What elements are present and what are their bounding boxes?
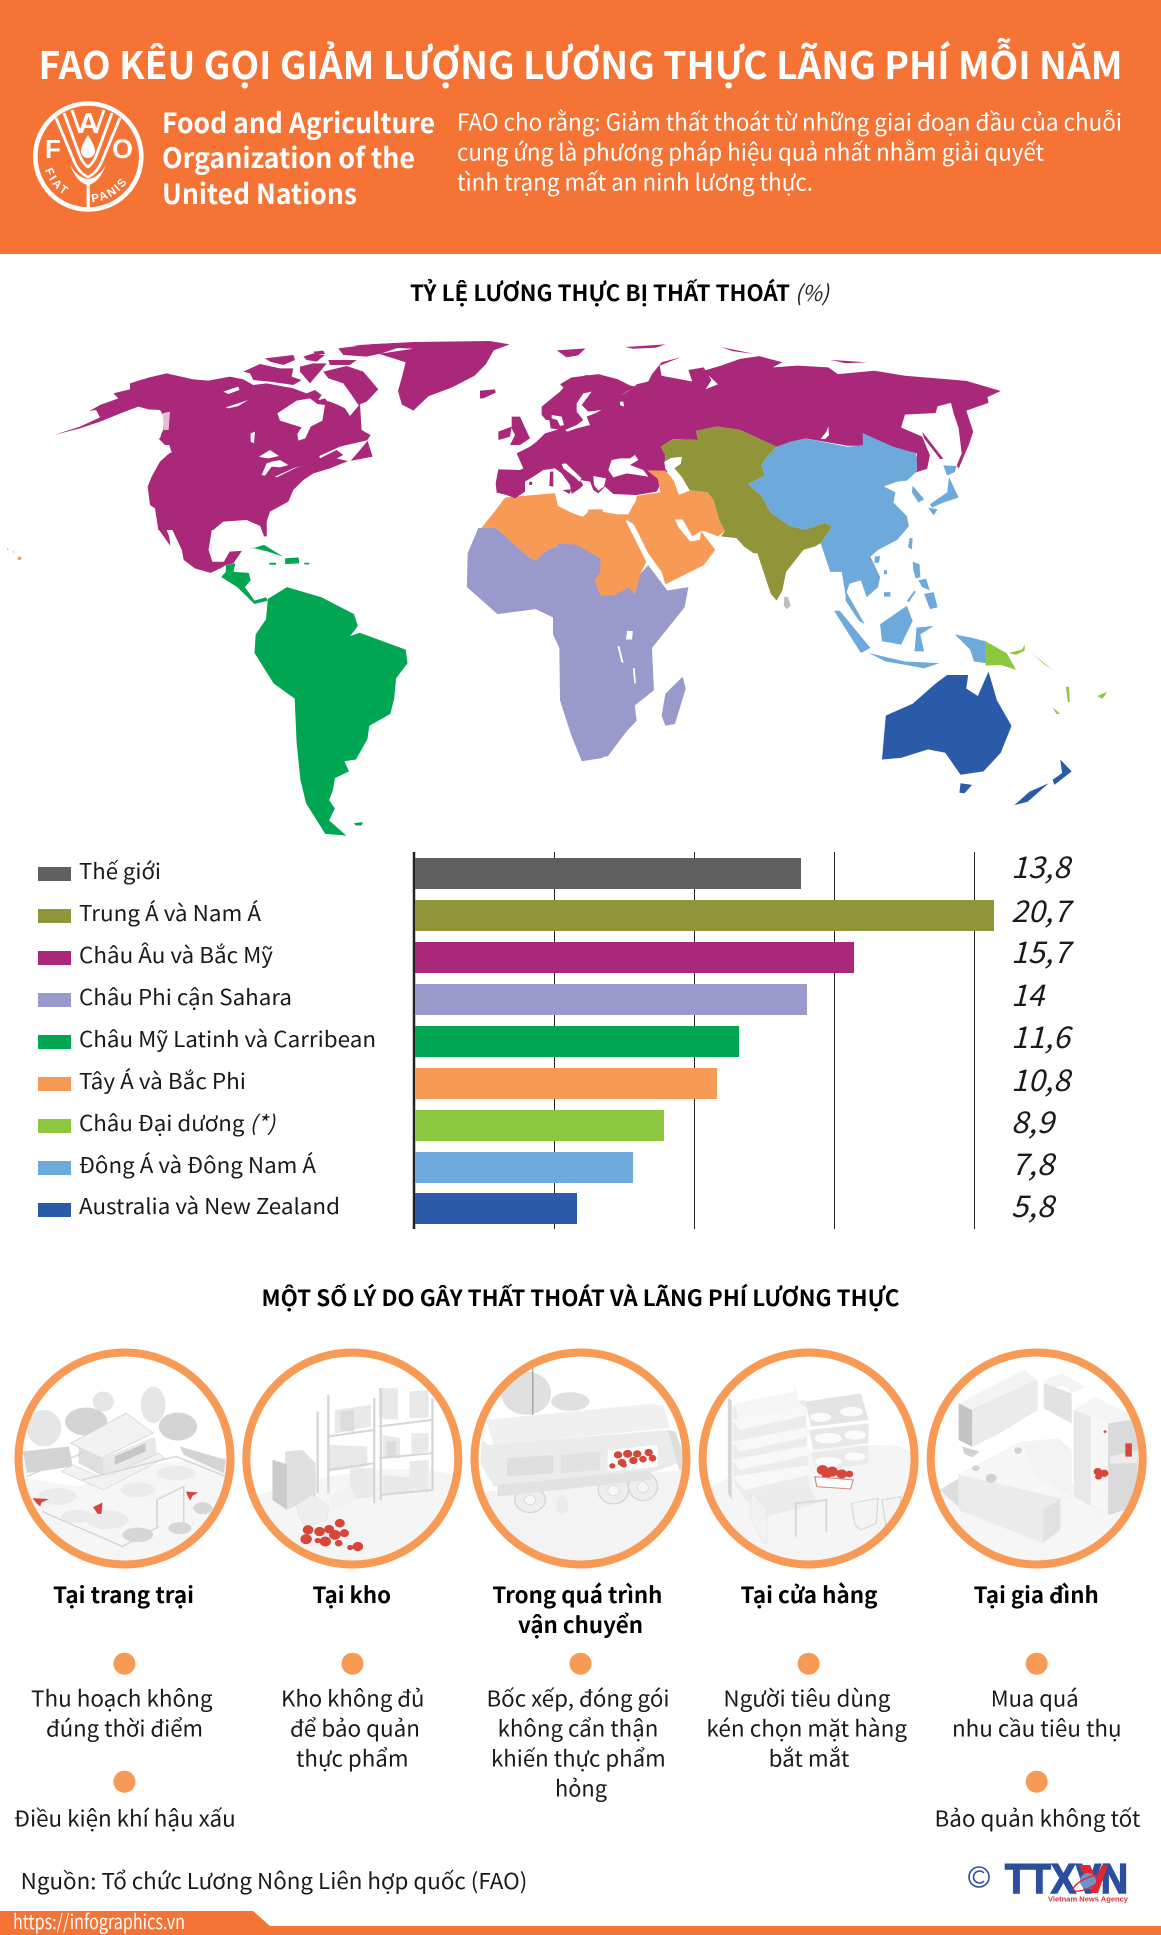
values: 15,7 [1011, 928, 1074, 972]
heading: loss rate: (%) [795, 276, 831, 308]
text: warehouse reasons: Kho không đủ [281, 1682, 424, 1714]
legend labels: Châu Đại dương (*) [79, 1107, 277, 1138]
values [1011, 843, 1074, 1226]
coastal speckle [163, 412, 170, 430]
column titles: vận chuyển [518, 1608, 643, 1640]
FAO name: United Nations [162, 173, 357, 213]
values: 13,8 [1011, 843, 1073, 887]
region: Canada and United States [54, 343, 413, 530]
text: store reasons: bắt mắt [769, 1742, 849, 1774]
illustration: kitchen [928, 1352, 1150, 1570]
icon: FAO logo [33, 101, 144, 212]
values: 7,8 [1011, 1140, 1057, 1184]
text: store reasons [706, 1682, 908, 1774]
values: 11,6 [1011, 1013, 1073, 1057]
text: transport reasons: không cẩn thận [498, 1712, 658, 1744]
illustration: store [703, 1352, 920, 1570]
intro text: FAO cho rằng: Giảm thất thoát từ những giai đoạn đầu của chuỗi [457, 104, 1122, 138]
legend labels: Châu Âu và Bắc Mỹ [79, 939, 273, 970]
region: Sub-Saharan Africa (west) [467, 528, 603, 761]
legend labels: Châu Phi cận Sahara [79, 981, 292, 1012]
sea: Caspian [664, 457, 690, 495]
text: farm reasons: Thu hoạch không [31, 1682, 213, 1714]
intro text: tình trạng mất an ninh lương thực. [457, 164, 813, 198]
column titles: Tại kho [312, 1578, 391, 1610]
source: Nguồn: Tổ chức Lương Nông Liên hợp quốc (FAO) [21, 1864, 527, 1896]
icon: FAO logo: FIAT [45, 168, 69, 194]
FAO name [162, 102, 435, 213]
region: East and Southeast Asia [748, 433, 985, 668]
illustration: farm [15, 1352, 237, 1570]
region: Europe [480, 375, 668, 498]
legend swatches [38, 867, 71, 1217]
text: transport reasons [486, 1682, 670, 1804]
text: transport reasons: Bốc xếp, đóng gói [486, 1682, 670, 1714]
column titles: Tại trang trại [53, 1578, 194, 1610]
values: 10,8 [1011, 1056, 1073, 1100]
region: West Asia and North Africa (west) [481, 493, 603, 560]
heading: reasons: MỘT SỐ LÝ DO GÂY THẤT THOÁT VÀ LÃNG PHÍ LƯƠNG THỰC [262, 1281, 899, 1313]
legend labels: Trung Á và Nam Á [79, 897, 261, 928]
text: household reasons [934, 1682, 1140, 1834]
region: Australia and New Zealand [882, 672, 1072, 805]
icon: FAO logo: O [112, 134, 133, 164]
icon: FAO logo: F [45, 134, 61, 164]
title: FAO KÊU GỌI GIẢM LƯỢNG LƯƠNG THỰC LÃNG PHÍ MỖI NĂM [38, 35, 1122, 90]
text: household reasons: Mua quá [991, 1682, 1079, 1714]
footer bar [0, 1906, 1161, 1935]
bullet dots [113, 1653, 1048, 1793]
legend labels: Đông Á và Đông Nam Á [79, 1149, 316, 1180]
icon: FAO logo: PANIS [92, 178, 126, 202]
text: household reasons: Bảo quản không tốt [934, 1802, 1140, 1834]
logo: TTXVN: Vietnam News Agency [1048, 1895, 1129, 1904]
region: Oceania [985, 641, 1107, 714]
logo: TTXVN: TTXVN [1005, 1855, 1128, 1902]
column titles: Tại gia đình [974, 1578, 1099, 1610]
region: West Asia and North Africa (east) [558, 470, 725, 596]
world map [7, 341, 1107, 836]
column titles: Tại cửa hàng [740, 1578, 878, 1610]
lakes and bays [157, 387, 368, 477]
region: Greenland and Mexico [157, 341, 586, 573]
values: 14 [1011, 971, 1046, 1015]
text: store reasons: Người tiêu dùng [723, 1682, 891, 1714]
text: farm reasons [14, 1682, 236, 1834]
text: warehouse reasons [281, 1682, 424, 1774]
legend labels: Australia và New Zealand [79, 1190, 340, 1221]
text: household reasons: nhu cầu tiêu thụ [952, 1712, 1122, 1744]
bars [415, 858, 994, 1224]
text: farm reasons: Điều kiện khí hậu xấu [14, 1802, 236, 1834]
FAO name: Organization of the [162, 137, 415, 177]
illustration: warehouse [245, 1352, 463, 1570]
text: store reasons: kén chọn mặt hàng [706, 1712, 908, 1744]
text: transport reasons: hỏng [555, 1772, 608, 1804]
region: Central and South Asia [660, 427, 832, 601]
intro text [457, 104, 1122, 198]
island: Sri Lanka [784, 597, 791, 609]
illustration: truck [471, 1352, 693, 1570]
values: 5,8 [1011, 1182, 1057, 1226]
text: warehouse reasons: để bảo quản [290, 1712, 420, 1744]
heading: loss rate: TỶ LỆ LƯƠNG THỰC BỊ THẤT THOÁT [410, 276, 790, 308]
FAO name: Food and Agriculture [162, 102, 435, 142]
legend labels: Châu Mỹ Latinh và Carribean [79, 1023, 376, 1054]
text: farm reasons: đúng thời điểm [46, 1712, 203, 1744]
region: Latin America and Caribbean [221, 545, 408, 836]
bar chart [38, 843, 1074, 1229]
legend labels: Tây Á và Bắc Phi [79, 1065, 246, 1096]
legend labels: Thế giới [79, 855, 161, 886]
legend labels [79, 855, 376, 1221]
icon: FAO logo: A [78, 108, 99, 140]
intro text: cung ứng là phương pháp hiệu quả nhất nhằm giải quyết [457, 134, 1044, 168]
icon: copyright [969, 1867, 989, 1887]
column titles: Trong quá trình [492, 1578, 662, 1610]
column titles [53, 1578, 1099, 1640]
values: 20,7 [1011, 887, 1074, 931]
region: Russia [560, 344, 1001, 473]
region: Sub-Saharan Africa (east) [558, 543, 688, 761]
islands: Hawaii [7, 549, 21, 560]
panel: header banner [0, 0, 1161, 254]
text: transport reasons: khiến thực phẩm [491, 1742, 666, 1774]
values: 8,9 [1011, 1098, 1057, 1142]
seas of Europe [552, 392, 648, 491]
text: warehouse reasons: thực phẩm [296, 1742, 408, 1774]
footer bar: https://infographics.vn [13, 1906, 185, 1935]
